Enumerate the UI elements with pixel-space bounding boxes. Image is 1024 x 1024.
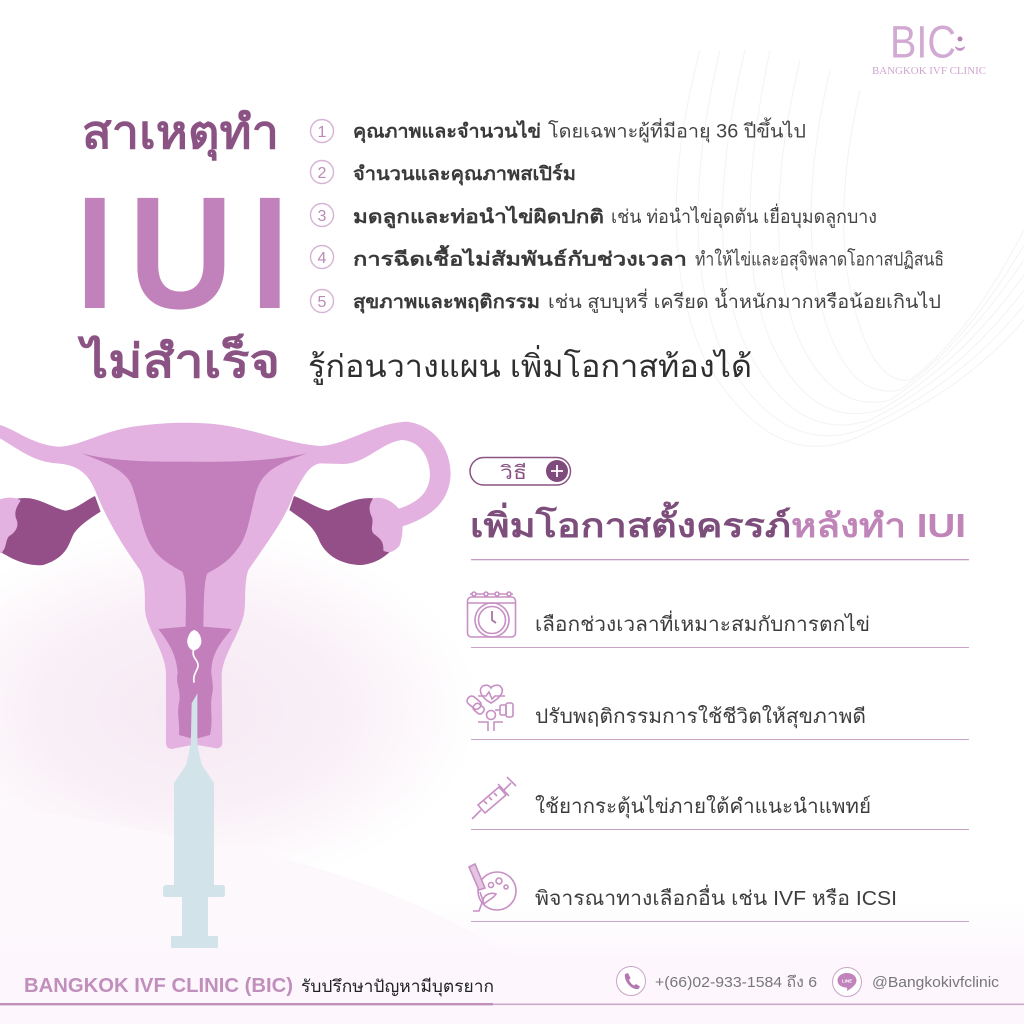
- title: [76, 106, 289, 387]
- left ovary: [0, 496, 101, 565]
- title: I: [251, 163, 289, 342]
- left fimbria: [0, 498, 21, 553]
- cause 2: จำนวนและคุณภาพสเปิร์ม: [353, 163, 576, 186]
- icon: LINE: [832, 968, 862, 996]
- cause 4: การฉีดเชื้อไม่สัมพันธ์กับช่วงเวลา: [353, 244, 687, 270]
- uterus body and tubes: [0, 422, 451, 749]
- tip 1: timing: [468, 592, 870, 637]
- section heading: เพิ่มโอกาสตั้งครรภ์: [470, 501, 791, 544]
- title: U: [129, 163, 233, 342]
- cause 3: 3: [318, 208, 327, 225]
- uterine cavity: [82, 453, 307, 738]
- needle tip: [191, 693, 197, 753]
- cause 4: [310, 244, 944, 272]
- cause 5: [310, 288, 941, 314]
- badge: วิธี +: [470, 458, 570, 485]
- tip 4: alternatives: [469, 864, 897, 911]
- tip 1: timing: เลือกช่วงเวลาที่เหมาะสมกับการตกไข่: [535, 610, 870, 636]
- section heading: หลังทำ IUI: [791, 507, 966, 544]
- cause 3: [310, 203, 877, 229]
- cause 1: [310, 118, 806, 144]
- title: ไม่สำเร็จ: [76, 333, 280, 387]
- LINE handle: @Bangkokivfclinic: [872, 974, 1000, 991]
- tip 3: medication: ใช้ยากระตุ้นไข่ภายใต้คำแนะนำแพทย์: [535, 795, 871, 819]
- logo: BIC: BIC: [890, 16, 956, 68]
- title: I: [76, 163, 114, 342]
- icon: health and fitness: [465, 685, 513, 731]
- syringe: [163, 693, 225, 948]
- title: สาเหตุทำ: [82, 106, 279, 161]
- icon: phone: [616, 966, 646, 996]
- icon: LINE: LINE: [842, 978, 852, 984]
- cause 3: มดลูกและท่อนำไข่ผิดปกติ: [353, 205, 604, 229]
- icon: syringe: [472, 777, 516, 819]
- cause 2: [310, 160, 576, 186]
- section heading: [470, 501, 966, 544]
- logo: BIC: BANGKOK IVF CLINIC: [872, 66, 986, 77]
- cause 4: ทำให้ไข่และอสุจิพลาดโอกาสปฏิสนธิ: [695, 248, 944, 272]
- tagline: รู้ก่อนวางแผน เพิ่มโอกาสท้องได้: [308, 345, 752, 385]
- cause 1: คุณภาพและจำนวนไข่: [353, 120, 541, 144]
- cause 2: 2: [318, 165, 327, 182]
- tip 3: medication: [472, 777, 871, 819]
- cause 5: เช่น สูบบุหรี่ เครียด น้ำหนักมากหรือน้อยเกินไป: [548, 288, 941, 314]
- icon: calendar clock: [468, 592, 516, 637]
- badge: วิธี +: วิธี: [500, 462, 527, 484]
- cause 4: 4: [318, 250, 327, 267]
- cause 5: สุขภาพและพฤติกรรม: [353, 292, 540, 314]
- list of causes: [310, 118, 944, 314]
- tip 4: alternatives: พิจารณาทางเลือกอื่น เช่น IVF หรือ ICSI: [535, 884, 897, 910]
- sperm: [187, 630, 201, 682]
- right fimbria: [370, 498, 403, 552]
- tip 2: lifestyle: [465, 685, 866, 731]
- cause 1: โดยเฉพาะผู้ที่มีอายุ 36 ปีขึ้นไป: [548, 118, 806, 144]
- phone number: +(66)02-933-1584 ถึง 6: [655, 974, 817, 991]
- footer: รับปรึกษาปัญหามีบุตรยาก: [301, 977, 494, 997]
- tip 2: lifestyle: ปรับพฤติกรรมการใช้ชีวิตให้สุขภาพดี: [535, 705, 866, 729]
- clinic name: BANGKOK IVF CLINIC (BIC): [24, 975, 293, 997]
- cause 5: 5: [318, 294, 327, 311]
- cause 1: 1: [318, 124, 327, 141]
- logo: BIC: [872, 16, 986, 77]
- illustration: uterus with syringe: [0, 422, 451, 948]
- icon: petri dish and pipette: [469, 864, 516, 911]
- right ovary: [289, 496, 390, 565]
- footer: [0, 966, 1024, 1005]
- cause 3: เช่น ท่อนำไข่อุดตัน เยื่อบุมดลูกบาง: [611, 203, 877, 229]
